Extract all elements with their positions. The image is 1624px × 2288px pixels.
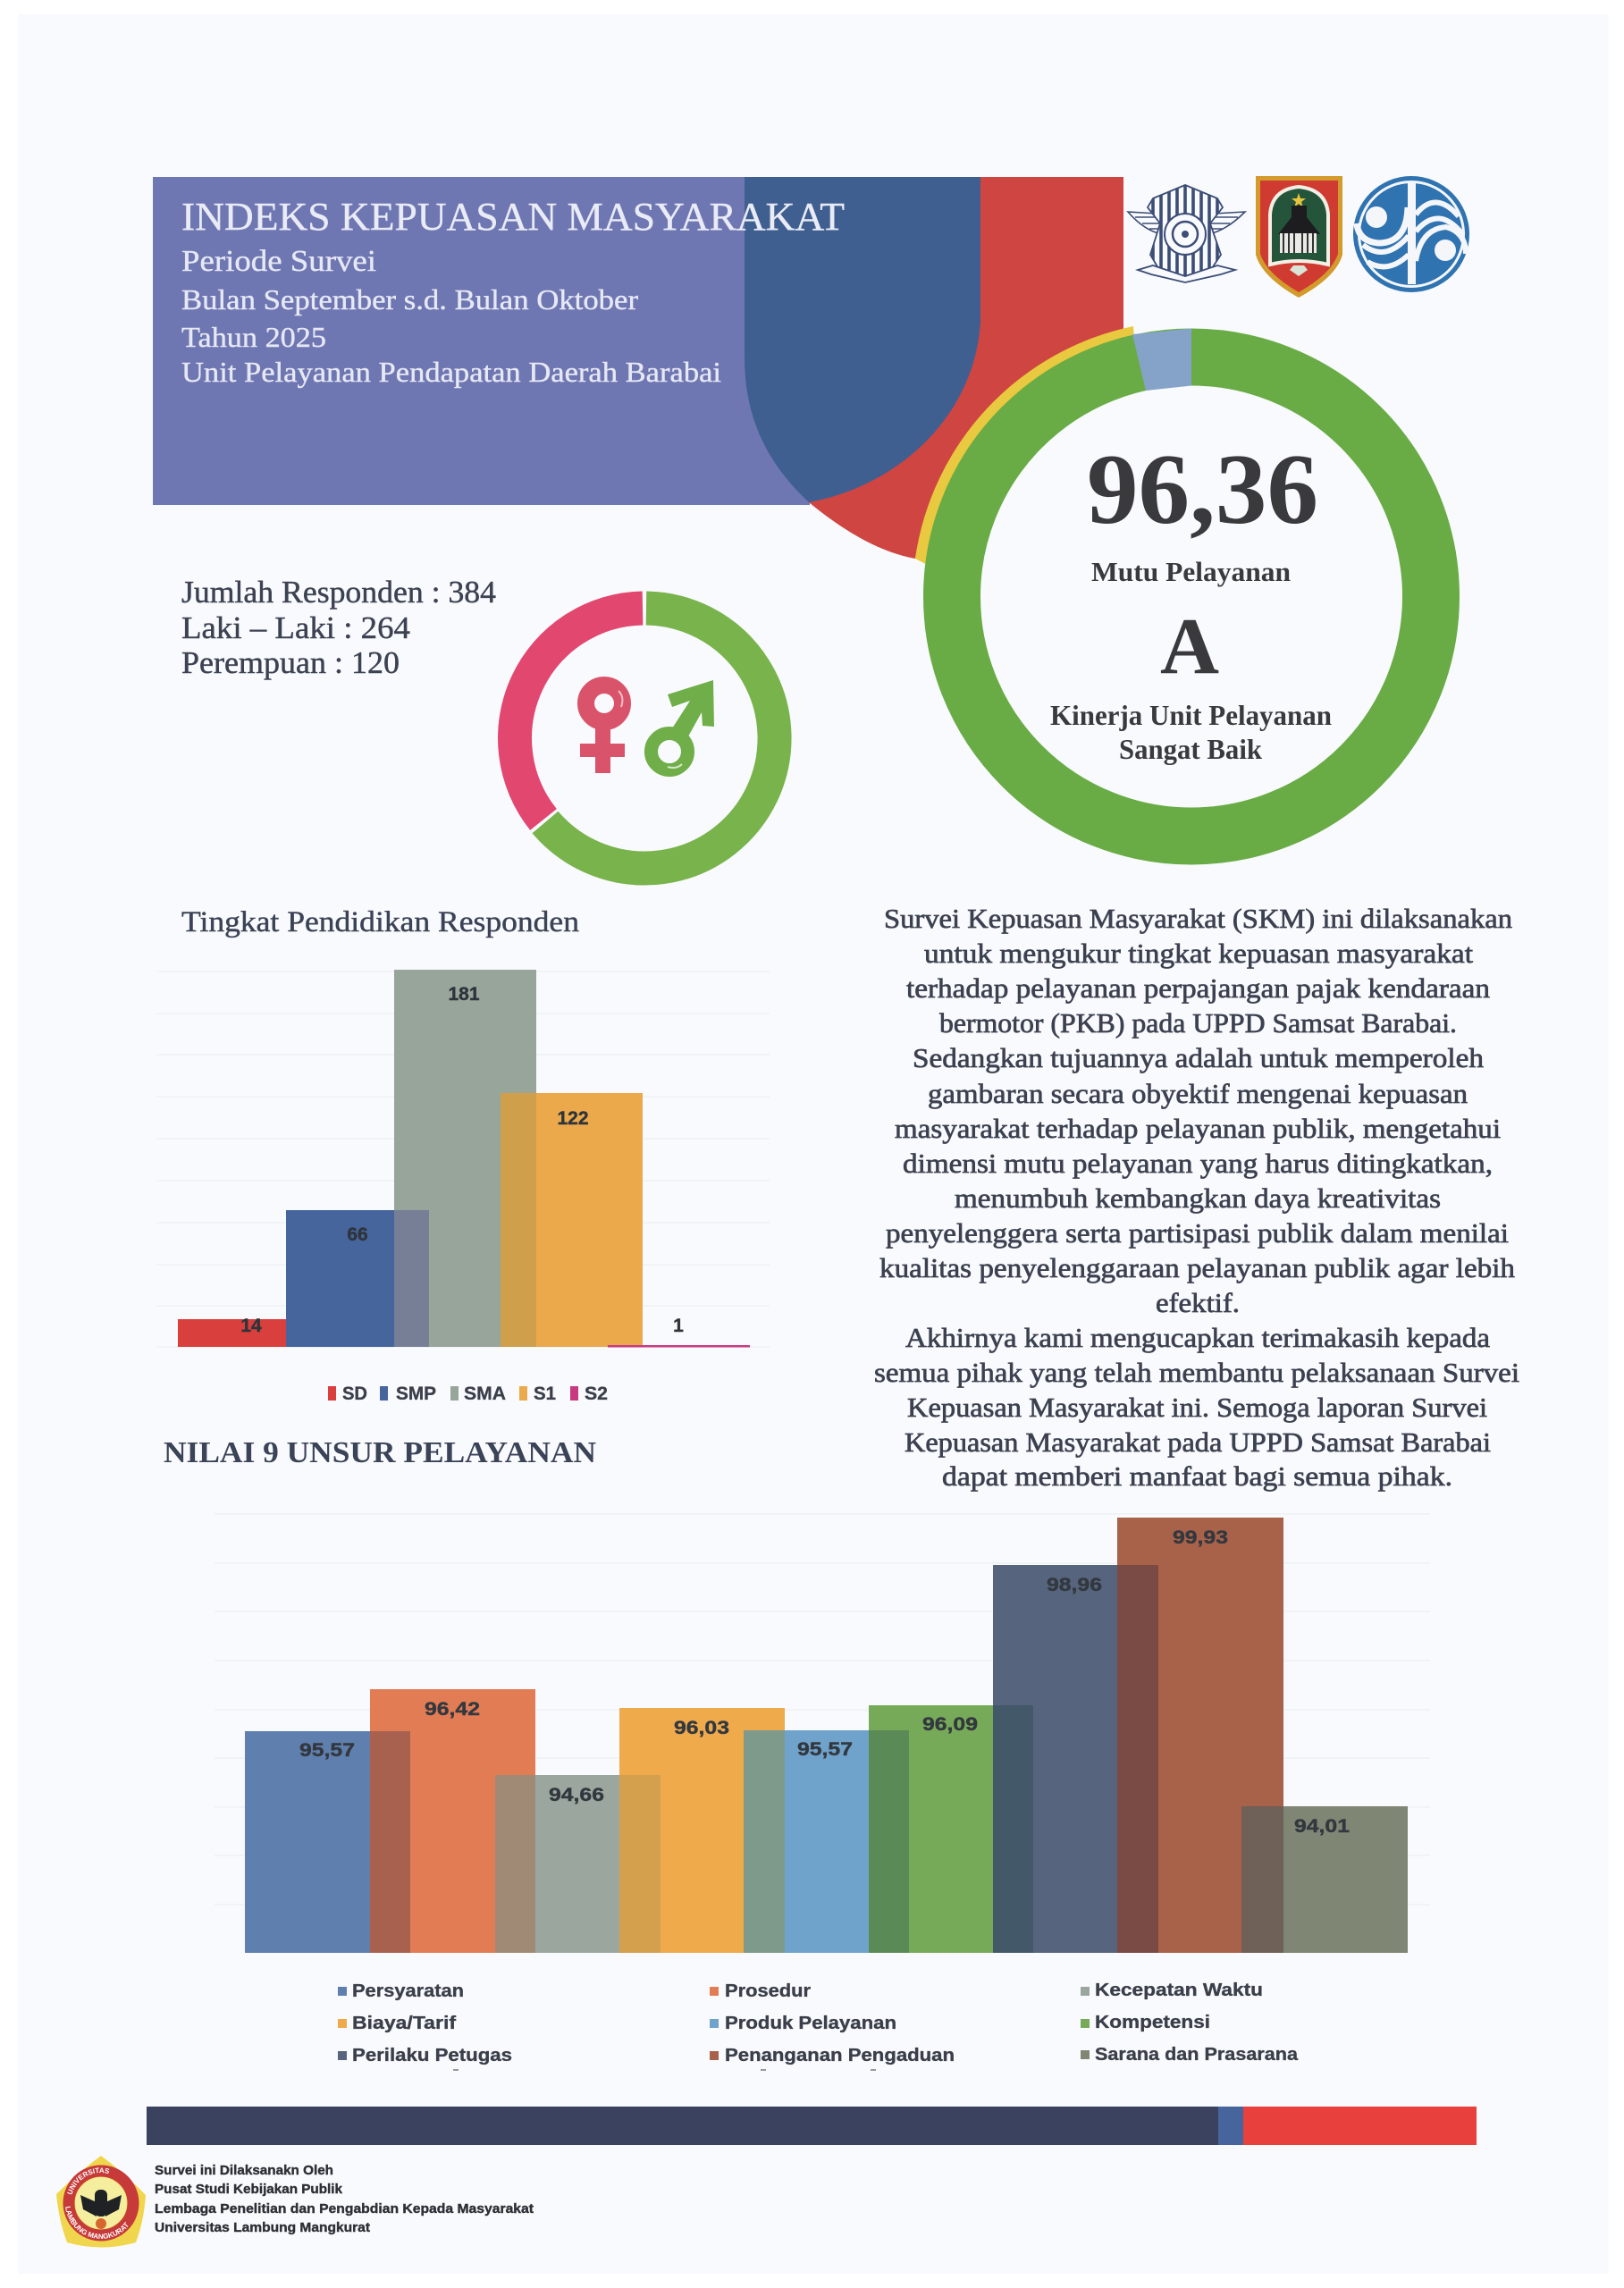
- text block: survey description: gambaran secara obyektif mengenai kepuasan: [928, 1078, 1468, 1109]
- bar value labels: 96,42: [425, 1699, 480, 1720]
- icon: police emblem: [1128, 183, 1245, 282]
- male arc: [545, 608, 775, 868]
- text block: survey organizer credits: Survei ini Dilaksanakn Oleh: [155, 2163, 333, 2178]
- bar value labels: 96,03: [674, 1718, 729, 1738]
- bar value labels: [299, 1527, 1350, 1837]
- service elements legend: Kecepatan Waktu: [1095, 1981, 1263, 2000]
- heading: education level: Tingkat Pendidikan Responden: [181, 906, 579, 938]
- footer color bar: [147, 2107, 1477, 2145]
- text block: survey organizer credits: [155, 2163, 534, 2235]
- education legend: S1: [534, 1384, 556, 1404]
- bar value labels: 99,93: [1173, 1527, 1228, 1548]
- green ring: [952, 358, 1431, 837]
- text block: survey description: menumbuh kembangkan daya kreativitas: [955, 1182, 1441, 1214]
- chart: gender donut: [515, 608, 775, 868]
- survey months: Bulan September s.d. Bulan Oktober: [181, 283, 638, 315]
- text block: survey organizer credits: Universitas Lambung Mangkurat: [155, 2220, 370, 2235]
- bar: Sarana dan Prasarana: [1241, 1806, 1408, 1953]
- bar: Persyaratan: [245, 1731, 410, 1953]
- text block: survey description: Kepuasan Masyarakat pada UPPD Samsat Barabai: [905, 1426, 1491, 1458]
- chart: respondent education bars: [156, 970, 770, 1404]
- text block: survey description: bermotor (PKB) pada UPPD Samsat Barabai.: [939, 1007, 1457, 1039]
- bar value labels: 181: [448, 984, 480, 1005]
- icon: female symbol: [580, 685, 625, 773]
- service quality label: Mutu Pelayanan: [1091, 556, 1291, 587]
- bar value labels: 95,57: [299, 1740, 355, 1761]
- score value: 96,36: [1087, 434, 1318, 545]
- bar value labels: 94,01: [1294, 1816, 1350, 1837]
- service elements legend: Biaya/Tarif: [352, 2014, 456, 2033]
- text block: survey organizer credits: Lembaga Penelitian dan Pengabdian Kepada Masyarakat: [155, 2201, 534, 2216]
- text block: survey description: masyarakat terhadap pelayanan publik, mengetahui: [895, 1113, 1501, 1144]
- bar value labels: 98,96: [1047, 1575, 1102, 1595]
- blue ring slice: [1132, 329, 1191, 391]
- bar value labels: 94,66: [549, 1785, 604, 1805]
- grade letter: A: [1160, 602, 1219, 691]
- text block: survey description: Sedangkan tujuannya adalah untuk memperoleh: [913, 1042, 1485, 1073]
- text block: survey description: semua pihak yang telah membantu pelaksanaan Survei: [874, 1357, 1519, 1388]
- respondent totals: [181, 575, 496, 680]
- bar SMA: [394, 970, 536, 1347]
- service elements legend: Prosedur: [725, 1981, 811, 2001]
- bar: Kecepatan Waktu: [495, 1775, 661, 1953]
- survey period label: Periode Survei: [181, 245, 376, 278]
- icon: university emblem: UNIVERSITAS: [67, 2167, 109, 2195]
- service elements legend: [338, 1981, 1299, 2065]
- text block: survey description: efektif.: [1156, 1287, 1240, 1318]
- chart: service quality score ring: [915, 326, 1431, 837]
- bar SD: [178, 1319, 286, 1347]
- icon: provincial shield emblem: [1256, 176, 1342, 298]
- education legend: SD: [342, 1384, 367, 1404]
- text block: survey description: dimensi mutu pelayanan yang harus ditingkatkan,: [903, 1148, 1493, 1179]
- survey year: Tahun 2025: [181, 321, 326, 353]
- education legend: SMP: [396, 1384, 436, 1404]
- red curved shape: [809, 177, 1123, 559]
- bar: Produk Pelayanan: [744, 1730, 909, 1953]
- bar: Prosedur: [370, 1689, 535, 1953]
- bar value labels: [240, 984, 684, 1336]
- bar value labels: 96,09: [922, 1714, 978, 1735]
- service elements legend: Perilaku Petugas: [352, 2046, 512, 2065]
- bar value labels: 122: [557, 1108, 589, 1129]
- icon: university emblem: LAMBUNG MANGKURAT: [65, 2206, 129, 2239]
- bar: Perilaku Petugas: [993, 1565, 1158, 1953]
- service elements legend: Kompetensi: [1095, 2013, 1210, 2032]
- bar: Biaya/Tarif: [619, 1708, 785, 1953]
- bar: Kompetensi: [869, 1705, 1033, 1953]
- text block: survey description: dapat memberi manfaat bagi semua pihak.: [942, 1460, 1452, 1492]
- service elements legend: Persyaratan: [352, 1981, 464, 2001]
- bar value labels: 66: [347, 1224, 368, 1245]
- bar: Penanganan Pengaduan: [1117, 1518, 1283, 1953]
- text block: survey description: Akhirnya kami mengucapkan terimakasih kepada: [905, 1322, 1490, 1353]
- service elements legend: Produk Pelayanan: [725, 2014, 896, 2033]
- text block: survey description: kualitas penyelenggaraan pelayanan publik agar lebih: [879, 1252, 1516, 1283]
- education legend: SMA: [464, 1384, 506, 1404]
- text block: survey description: [874, 903, 1519, 1492]
- icon: university emblem: [56, 2156, 146, 2247]
- icon: blue circular emblem: [1353, 176, 1469, 292]
- dark blue curved shape: [745, 177, 980, 502]
- text block: survey description: Survei Kepuasan Masyarakat (SKM) ini dilaksanakan: [884, 903, 1513, 934]
- text block: survey organizer credits: Pusat Studi Kebijakan Publik: [155, 2182, 343, 2197]
- panel: header banner: [153, 177, 1123, 559]
- text block: survey description: terhadap pelayanan perpajangan pajak kendaraan: [906, 972, 1491, 1004]
- text block: survey description: untuk mengukur tingkat kepuasan masyarakat: [924, 938, 1473, 969]
- text block: survey description: Kepuasan Masyarakat ini. Semoga laporan Survei: [907, 1392, 1487, 1423]
- bar SMP: [286, 1210, 394, 1347]
- bar S1: [536, 1093, 643, 1347]
- service unit name: Unit Pelayanan Pendapatan Daerah Barabai: [181, 356, 721, 388]
- education legend: [328, 1384, 608, 1404]
- text block: survey description: penyelenggera serta partisipasi publik dalam menilai: [886, 1217, 1509, 1249]
- bar value labels: 95,57: [797, 1739, 853, 1760]
- bar S2: [608, 1345, 750, 1348]
- purple banner background: [153, 177, 810, 505]
- bar value labels: 1: [673, 1316, 684, 1336]
- bar value labels: 14: [240, 1316, 262, 1336]
- chart: nine service element scores: [215, 1514, 1430, 2070]
- female arc: [515, 608, 643, 820]
- performance label: Kinerja Unit Pelayanan: [1050, 699, 1332, 731]
- service elements legend: Penanganan Pengaduan: [725, 2046, 955, 2065]
- service elements legend: Sarana dan Prasarana: [1095, 2045, 1299, 2065]
- heading: nine service elements: NILAI 9 UNSUR PELAYANAN: [164, 1436, 596, 1469]
- yellow ring edge: [915, 326, 1135, 572]
- icon: male symbol: [651, 680, 714, 770]
- respondent totals: Laki – Laki : 264: [181, 610, 410, 645]
- header title: INDEKS KEPUASAN MASYARAKAT: [181, 195, 845, 239]
- respondent totals: Perempuan : 120: [181, 645, 400, 680]
- respondent totals: Jumlah Responden : 384: [181, 575, 496, 610]
- education legend: S2: [585, 1384, 608, 1404]
- performance rating: Sangat Baik: [1119, 733, 1262, 765]
